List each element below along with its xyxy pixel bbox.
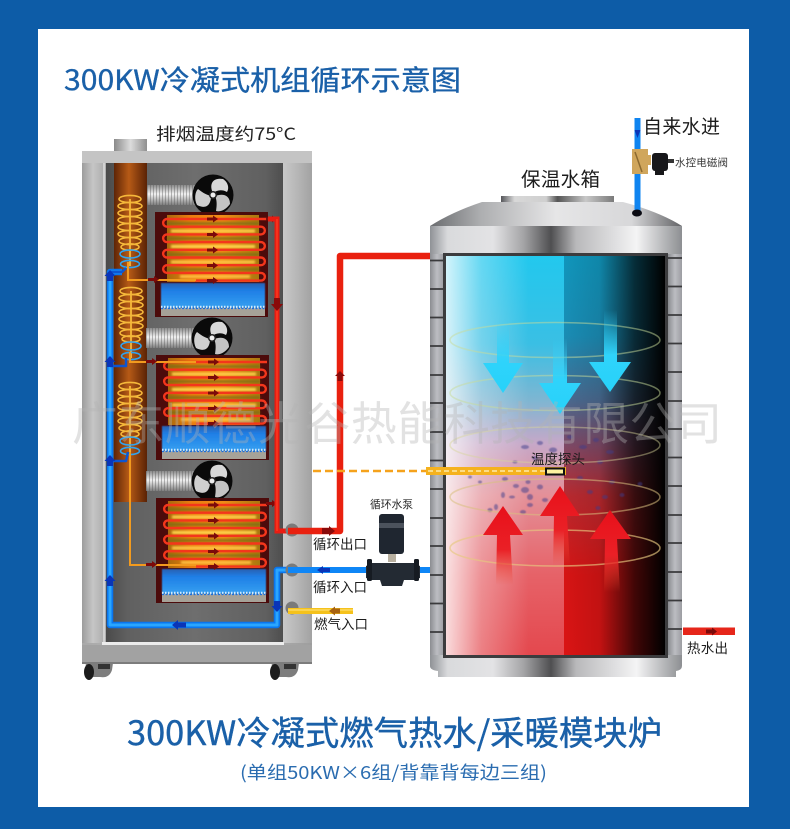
label: exhaust temperature: 排烟温度约75°C	[156, 120, 296, 145]
label: probe: 温度探头	[531, 448, 585, 468]
label: solenoid valve: 水控电磁阀	[675, 155, 728, 170]
tank insulation left	[430, 253, 444, 658]
sediment specks	[468, 435, 642, 514]
bottom title: 300KW冷凝式燃气热水/采暖模块炉	[127, 706, 662, 755]
flue column	[114, 163, 147, 502]
label: tap water: 自来水进	[643, 112, 720, 139]
solenoid valve	[632, 149, 674, 175]
bottom subtitle: (单组50KW×6组/背靠背每边三组)	[240, 759, 547, 785]
cold water inlet pipe	[632, 118, 642, 216]
fans and ducts	[146, 174, 234, 502]
hot water arrows in tank	[483, 486, 631, 592]
storage tank	[426, 118, 735, 677]
tank insulation right	[668, 253, 682, 658]
burner modules	[155, 212, 269, 603]
cold water return pipe	[288, 566, 430, 574]
cabinet shell	[82, 151, 312, 663]
convection rings	[450, 322, 660, 566]
label: pump: 循环水泵	[370, 496, 413, 512]
casters	[84, 663, 299, 680]
temperature probe	[426, 467, 566, 475]
gas feed lines	[128, 262, 196, 565]
circulation pump	[366, 514, 420, 586]
label: gas inlet: 燃气入口	[314, 613, 368, 633]
label: outlet: 循环出口	[313, 533, 367, 553]
cabinet interior	[106, 163, 283, 642]
tank cone top	[430, 202, 682, 226]
cold water pipe	[110, 268, 288, 625]
hot water outlet	[683, 628, 735, 636]
gas inlet pipe	[288, 606, 353, 616]
label: tank: 保温水箱	[521, 163, 600, 192]
tank band top	[430, 226, 682, 254]
hot water riser	[268, 219, 288, 531]
watermark: 广东顺德光谷热能科技有限公司	[72, 388, 722, 454]
title: 300KW冷凝式机组循环示意图	[64, 59, 461, 99]
cold water arrows in tank	[483, 310, 631, 414]
heat recovery coils	[118, 195, 143, 455]
cold water arrows	[104, 270, 282, 630]
boiler cabinet	[82, 139, 312, 680]
chimney	[114, 139, 147, 152]
label: inlet: 循环入口	[313, 576, 367, 596]
port fittings	[286, 524, 298, 614]
riser arrow	[271, 298, 283, 311]
temperature sensor dashed line	[313, 470, 428, 472]
label: hot water out: 热水出	[687, 637, 728, 657]
tank band bottom	[430, 655, 682, 677]
small arrows on gas lines	[146, 216, 277, 568]
tank window	[443, 253, 668, 658]
hot water outlet pipe to tank	[288, 256, 431, 536]
tank lid	[501, 196, 614, 203]
